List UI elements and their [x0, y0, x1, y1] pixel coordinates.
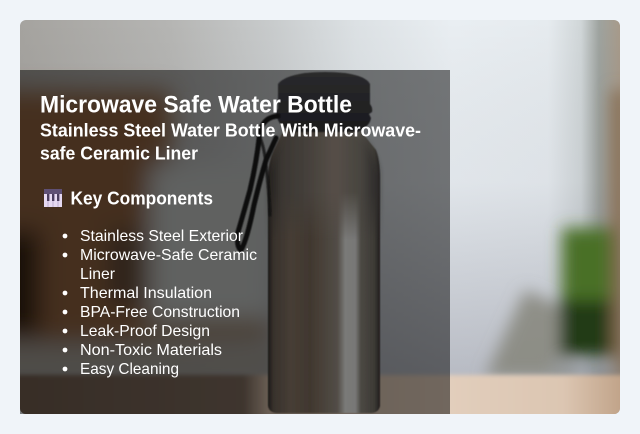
subtitle: [40, 120, 421, 164]
subtitle: safe Ceramic Liner: [40, 144, 198, 164]
list bullets: [63, 234, 67, 371]
icon: piano keys: [44, 189, 62, 207]
list items: Liner: [80, 266, 116, 283]
list items: Leak-Proof Design: [80, 323, 210, 340]
dark text panel: [20, 70, 450, 414]
blurred plant: [485, 90, 626, 378]
blurred brown shelf: [20, 80, 268, 372]
section heading: key components: Key Components: [70, 188, 213, 208]
plant pot base: [552, 358, 618, 375]
bottle cap: [276, 72, 372, 132]
subtitle: Stainless Steel Water Bottle With Microwave-: [40, 120, 421, 140]
list items: Thermal Insulation: [80, 285, 212, 302]
list items: Non-Toxic Materials: [80, 342, 222, 359]
carry strap: [237, 116, 278, 250]
list items: Easy Cleaning: [80, 361, 179, 378]
title: Microwave Safe Water Bottle: [40, 92, 352, 118]
list items: BPA-Free Construction: [80, 304, 240, 321]
bottle shoulder: [270, 132, 378, 240]
water bottle: [237, 72, 380, 413]
bottle body: [268, 130, 380, 413]
list items: Stainless Steel Exterior: [80, 228, 244, 245]
key components list: [63, 228, 257, 378]
wooden table: [20, 372, 620, 414]
list items: [80, 228, 257, 378]
list items: Microwave-Safe Ceramic: [80, 247, 257, 264]
